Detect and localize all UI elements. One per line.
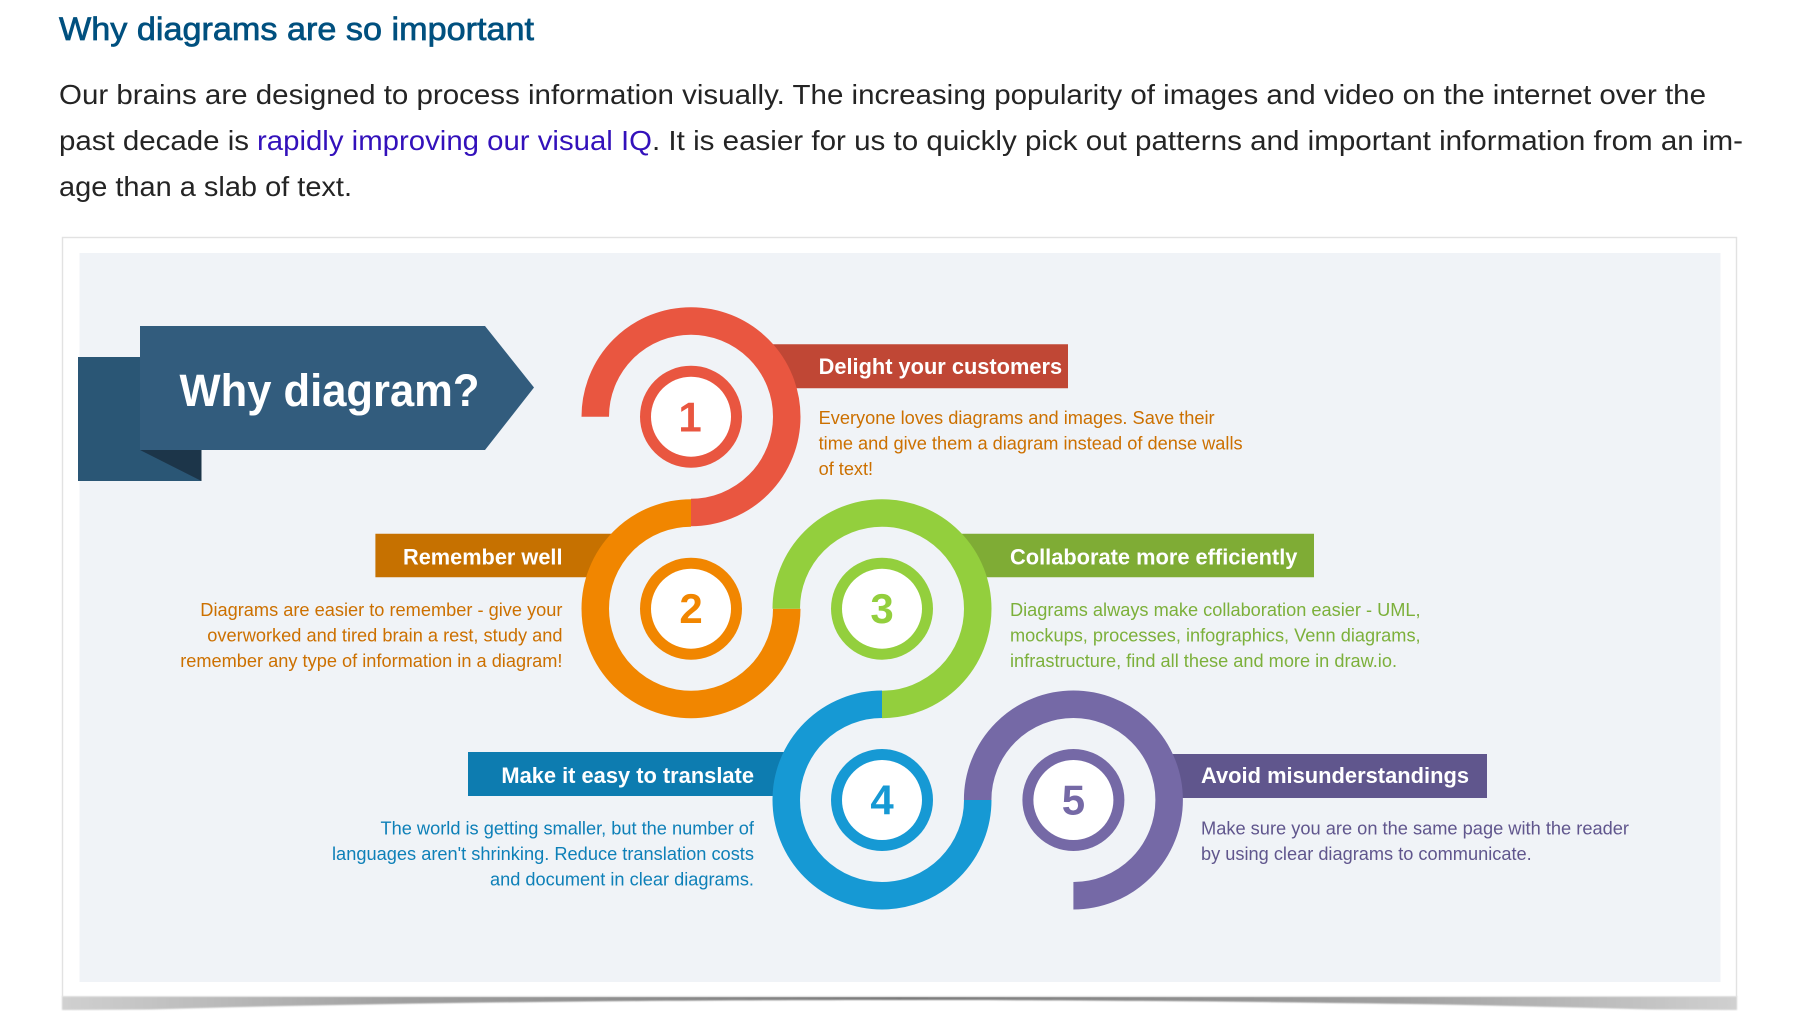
body text 4: The world is getting smaller, but the number of	[380, 818, 755, 839]
header bar 4: Make it easy to translate	[501, 763, 754, 788]
spiral arc 1	[595, 321, 787, 512]
body text 5: by using clear diagrams to communicate.	[1201, 843, 1532, 864]
body text 4: and document in clear diagrams.	[490, 868, 754, 890]
step 4: Make it easy to translate	[332, 704, 978, 896]
card shadow	[62, 996, 1737, 1010]
header bar 2: Remember well	[403, 545, 562, 570]
body text 1	[819, 407, 1243, 479]
body text 2: overworked and tired brain a rest, study and	[207, 624, 563, 646]
header bar 4	[468, 752, 799, 796]
spiral arc 5	[978, 704, 1169, 896]
body text 1: time and give them a diagram instead of dense walls	[819, 432, 1243, 454]
intro paragraph	[59, 79, 1743, 202]
number badge 2	[640, 558, 742, 660]
spiral arc 3	[786, 513, 978, 704]
step 2: Remember well	[180, 513, 787, 704]
step 3: Collaborate more efficiently	[786, 513, 1421, 704]
intro paragraph: past decade is	[59, 125, 249, 156]
body text 4: languages aren't shrinking. Reduce translation costs	[332, 843, 754, 864]
header bar 3: Collaborate more efficiently	[1010, 545, 1298, 570]
number badge 5: 5	[1062, 777, 1085, 824]
header bar 3	[942, 534, 1314, 577]
body text 4	[332, 818, 755, 890]
intro paragraph: age than a slab of text.	[59, 171, 352, 202]
banner: Why diagram?: Why diagram?	[180, 365, 480, 416]
banner: Why diagram?	[78, 326, 534, 481]
body text 1: of text!	[819, 458, 873, 479]
header bar 5: Avoid misunderstandings	[1201, 763, 1469, 788]
spiral arc 2	[595, 513, 787, 704]
body text 3: infrastructure, find all these and more in draw.io.	[1010, 650, 1397, 671]
number badge 1: 1	[678, 394, 702, 440]
number badge 4	[831, 749, 933, 851]
heading: Why diagrams are so important	[59, 11, 534, 47]
number badge 3: 3	[870, 585, 894, 632]
header bar 5	[1157, 754, 1487, 798]
spiral arc 4	[786, 704, 978, 896]
intro paragraph: Our brains are designed to process information visually. The increasing popularity of images and video on the internet over the	[59, 79, 1706, 110]
header bar 1	[760, 344, 1068, 388]
intro paragraph: rapidly improving our visual IQ	[257, 125, 652, 156]
body text 2: remember any type of information in a diagram!	[180, 650, 562, 671]
number badge 2: 2	[679, 585, 703, 632]
body text 5	[1201, 818, 1629, 864]
body text 1: Everyone loves diagrams and images. Save their	[819, 407, 1215, 428]
header bar 2	[375, 534, 631, 577]
number badge 3	[831, 558, 933, 660]
body text 2: Diagrams are easier to remember - give your	[200, 599, 563, 620]
number badge 5	[1022, 749, 1124, 851]
header bar 1: Delight your customers	[819, 354, 1062, 379]
intro paragraph: . It is easier for us to quickly pick out patterns and important information from an im-	[652, 125, 1743, 156]
infographic panel	[78, 253, 1720, 982]
step 1: Delight your customers	[595, 321, 1243, 512]
body text 3: mockups, processes, infographics, Venn diagrams,	[1010, 624, 1421, 646]
number badge 4: 4	[870, 777, 894, 824]
body text 3: Diagrams always make collaboration easier - UML,	[1010, 599, 1421, 620]
body text 5: Make sure you are on the same page with the reader	[1201, 818, 1629, 839]
step 5: Avoid misunderstandings	[978, 704, 1629, 896]
number badge 1	[640, 366, 742, 468]
body text 2	[180, 599, 562, 671]
image card frame	[62, 238, 1736, 996]
body text 3	[1010, 599, 1421, 671]
